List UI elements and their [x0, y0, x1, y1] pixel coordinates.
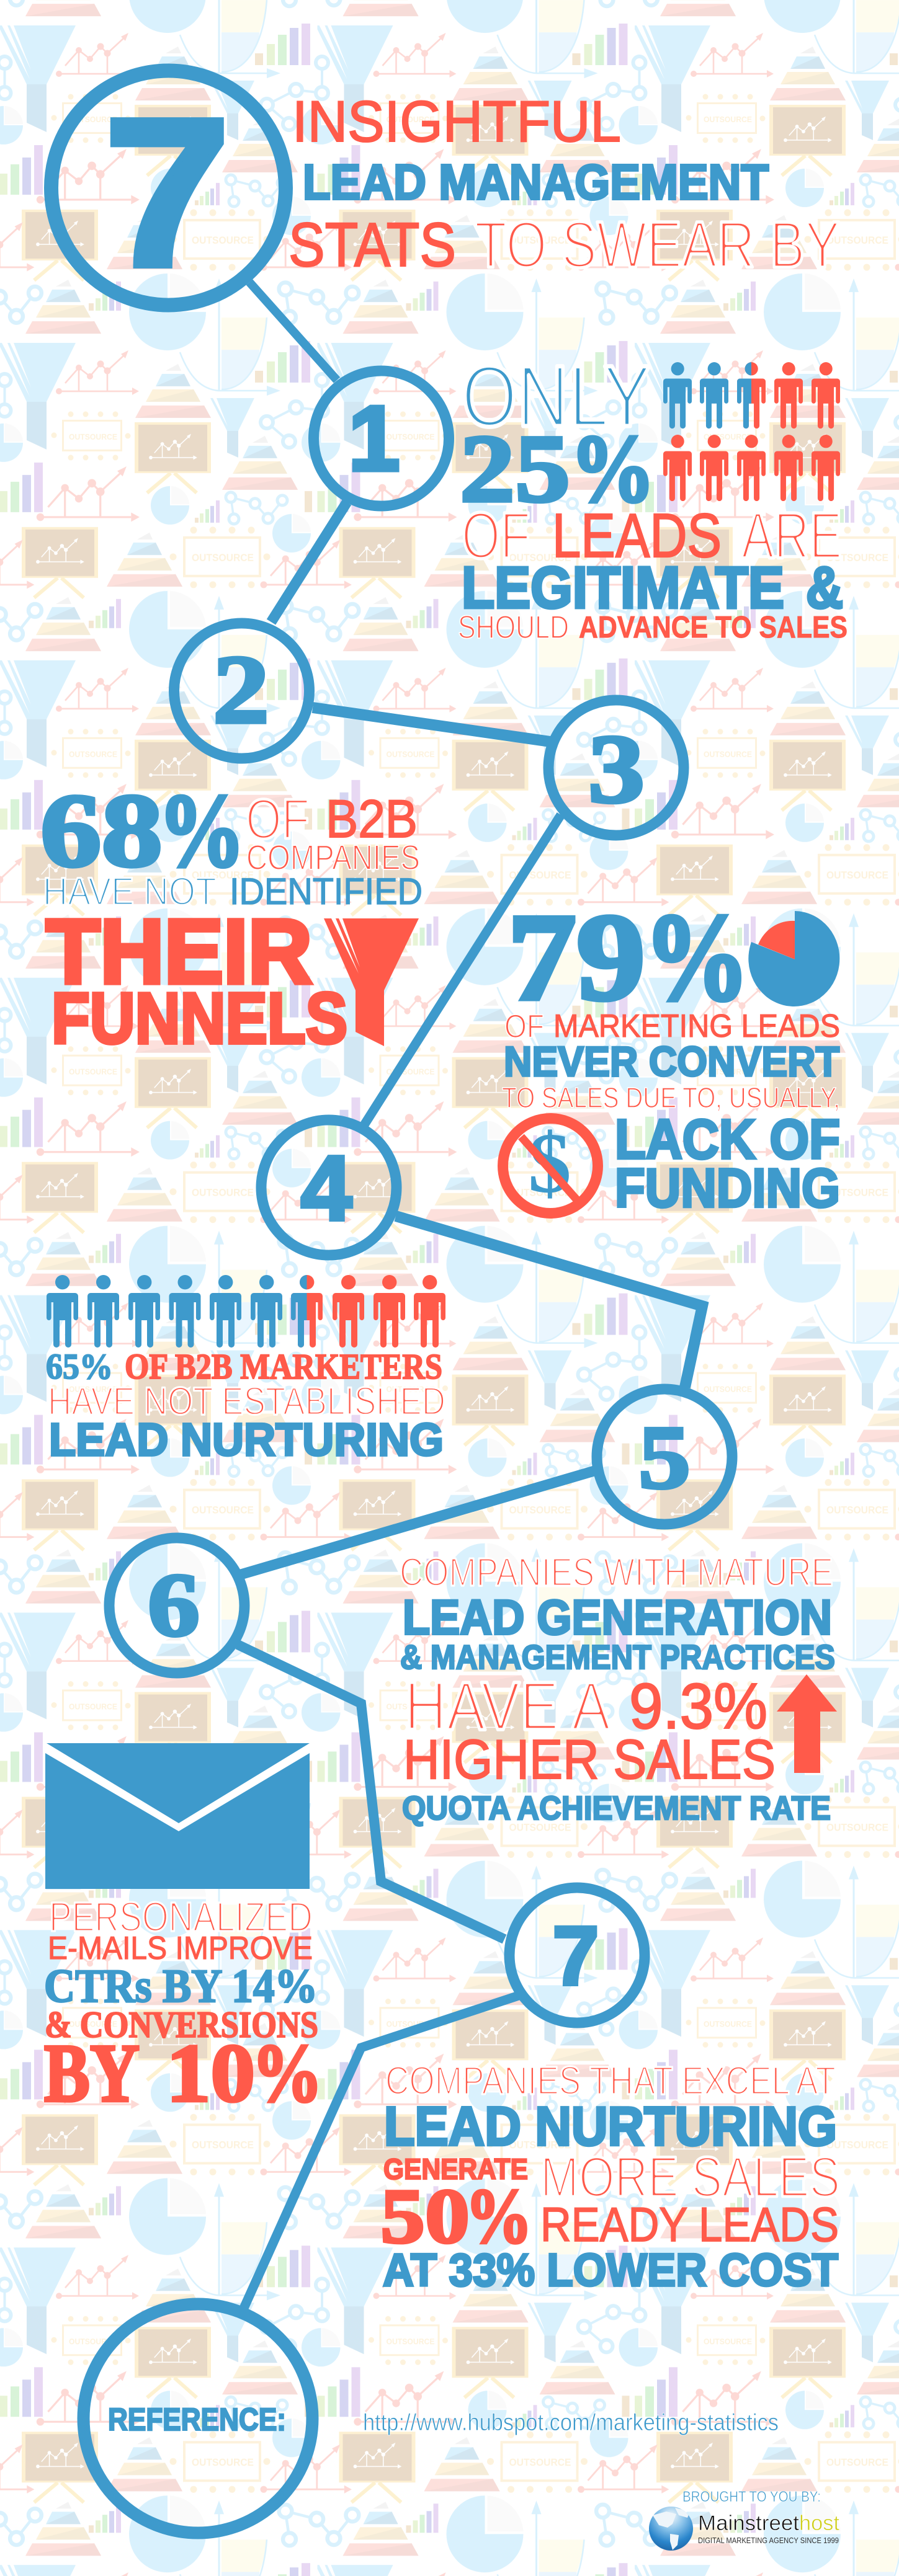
stat 3 text: NEVER CONVERT — [504, 1038, 839, 1085]
reference circle: REFERENCE: — [108, 2402, 286, 2437]
stat 5 text: HIGHER SALES — [403, 1729, 776, 1791]
stat 2 text: FUNNELS — [51, 978, 347, 1059]
stat 5 text: 9.3% — [629, 1671, 767, 1743]
icon: people 65 percent — [47, 1275, 445, 1348]
icon: people 25 percent — [663, 362, 840, 501]
step 2 circle — [174, 623, 309, 758]
stat 3 text: MARKETING LEADS — [553, 1008, 840, 1044]
step 6 circle — [109, 1538, 244, 1673]
step 1 circle: 1 — [349, 388, 400, 490]
title: INSIGHTFUL — [292, 89, 621, 154]
stat 7 text: LEAD NURTURING — [384, 2095, 837, 2157]
brought to you by: BROUGHT TO YOU BY: — [682, 2489, 821, 2505]
stat 1 text: LEADS — [552, 501, 722, 571]
stat 1 text: OF — [462, 499, 530, 572]
reference circle — [83, 2304, 313, 2533]
reference link: http://www.hubspot.com/marketing-statistics — [363, 2410, 779, 2436]
step 2 circle: 2 — [213, 636, 269, 744]
stat 2 text: IDENTIFIED — [230, 871, 423, 912]
stat 3 percentage: % — [644, 889, 749, 1026]
step 4 circle — [261, 1120, 396, 1255]
stat 2 text: OF — [246, 788, 310, 851]
icon: red funnel — [324, 918, 419, 1046]
stat 7 text: AT 33% LOWER COST — [383, 2244, 838, 2296]
title circle with 7: 7 — [104, 75, 231, 311]
stat 6 text: E-MAILS IMPROVE — [48, 1930, 313, 1966]
icon: no money — [503, 1116, 598, 1213]
icon: pie chart 79 percent — [748, 911, 839, 1006]
stat 1 text: ONLY — [462, 347, 651, 445]
title circle with 7 — [51, 71, 285, 311]
stat 3 text: LACK OF — [615, 1109, 840, 1171]
stat 5 text: & MANAGEMENT PRACTICES — [400, 1638, 835, 1676]
stat 7 text: READY LEADS — [540, 2197, 839, 2252]
stat 1 text: ARE — [741, 499, 842, 572]
stat 5 text: QUOTA ACHIEVEMENT RATE — [402, 1790, 831, 1827]
stat 3 text — [502, 1008, 840, 1219]
stat 6 text: % — [252, 2027, 323, 2119]
stat 4 text: HAVE NOT ESTABLISHED — [48, 1380, 445, 1423]
stat 7 text: % — [465, 2174, 532, 2260]
step 5 circle: 5 — [638, 1407, 691, 1508]
stat 3 percentage — [508, 889, 749, 1026]
stat 2 text: COMPANIES — [246, 838, 420, 877]
stat 3 percentage: 79 — [508, 889, 645, 1026]
stat 2 text: 68 — [40, 772, 163, 889]
stat 4 text: LEAD NURTURING — [49, 1414, 444, 1465]
step 7 circle — [509, 1888, 645, 2023]
stat 4 text: OF B2B MARKETERS — [125, 1346, 442, 1387]
step 3 circle — [548, 700, 684, 835]
logo: Mainstreethost: host — [799, 2512, 840, 2535]
stat 5 text: LEAD GENERATION — [403, 1589, 832, 1645]
stat 7 text — [380, 2058, 840, 2296]
stat 2 text: B2B — [326, 789, 418, 849]
title — [288, 89, 840, 282]
stat 2 text: HAVE NOT — [43, 870, 217, 913]
title: STATS — [288, 210, 456, 280]
step 7 circle: 7 — [553, 1910, 599, 2002]
step 4 circle: 4 — [301, 1137, 352, 1240]
stat 5 text — [400, 1550, 835, 1827]
stat 3 text: TO SALES DUE TO, USUALLY, — [502, 1081, 840, 1114]
stat 6 text: BY — [44, 2027, 140, 2119]
stat 1 text: 25 — [460, 415, 570, 522]
stat 1 text: LEGITIMATE — [462, 555, 784, 621]
stat 1 text: % — [570, 415, 655, 522]
step 5 circle — [597, 1389, 732, 1524]
stat 2 text — [40, 772, 423, 1059]
stat 1 text: & — [806, 555, 843, 621]
stat 6 text: & CONVERSIONS — [45, 2004, 318, 2045]
icon: up arrow — [777, 1674, 837, 1773]
connector path — [238, 282, 702, 2308]
stat 5 text: HAVE A — [405, 1668, 611, 1744]
icon: envelope — [45, 1743, 310, 1889]
step 1 circle — [314, 371, 449, 506]
stat 6 text: PERSONALIZED — [49, 1894, 313, 1940]
logo: Mainstreethost — [649, 2507, 840, 2551]
stat 2 text: THEIR — [46, 901, 312, 1003]
stat 7 text: 50 — [380, 2174, 470, 2260]
stat 2 text: % — [158, 772, 245, 889]
step 3 circle: 3 — [588, 715, 645, 824]
step 6 circle: 6 — [148, 1555, 200, 1655]
stat 3 text: OF — [504, 1008, 544, 1045]
stat 1 text — [458, 347, 848, 646]
stat 6 text: CTRs BY 14% — [44, 1960, 318, 2012]
stat 4 text: 65% — [46, 1346, 113, 1387]
stat 4 text — [46, 1346, 445, 1465]
stat 7 text: GENERATE — [383, 2152, 528, 2185]
stat 6 text — [44, 1894, 323, 2119]
icon: no money: $ — [528, 1116, 571, 1211]
stat 6 text: 10 — [166, 2027, 255, 2119]
title: LEAD MANAGEMENT — [303, 154, 769, 210]
stat 1 text: ADVANCE TO SALES — [579, 611, 848, 644]
stat 1 text: SHOULD — [458, 610, 569, 646]
logo: Mainstreethost: Mainstreet — [698, 2512, 800, 2535]
stat 3 text: FUNDING — [615, 1157, 840, 1219]
logo: Mainstreethost: DIGITAL MARKETING AGENCY SINCE 1999 — [698, 2536, 839, 2545]
